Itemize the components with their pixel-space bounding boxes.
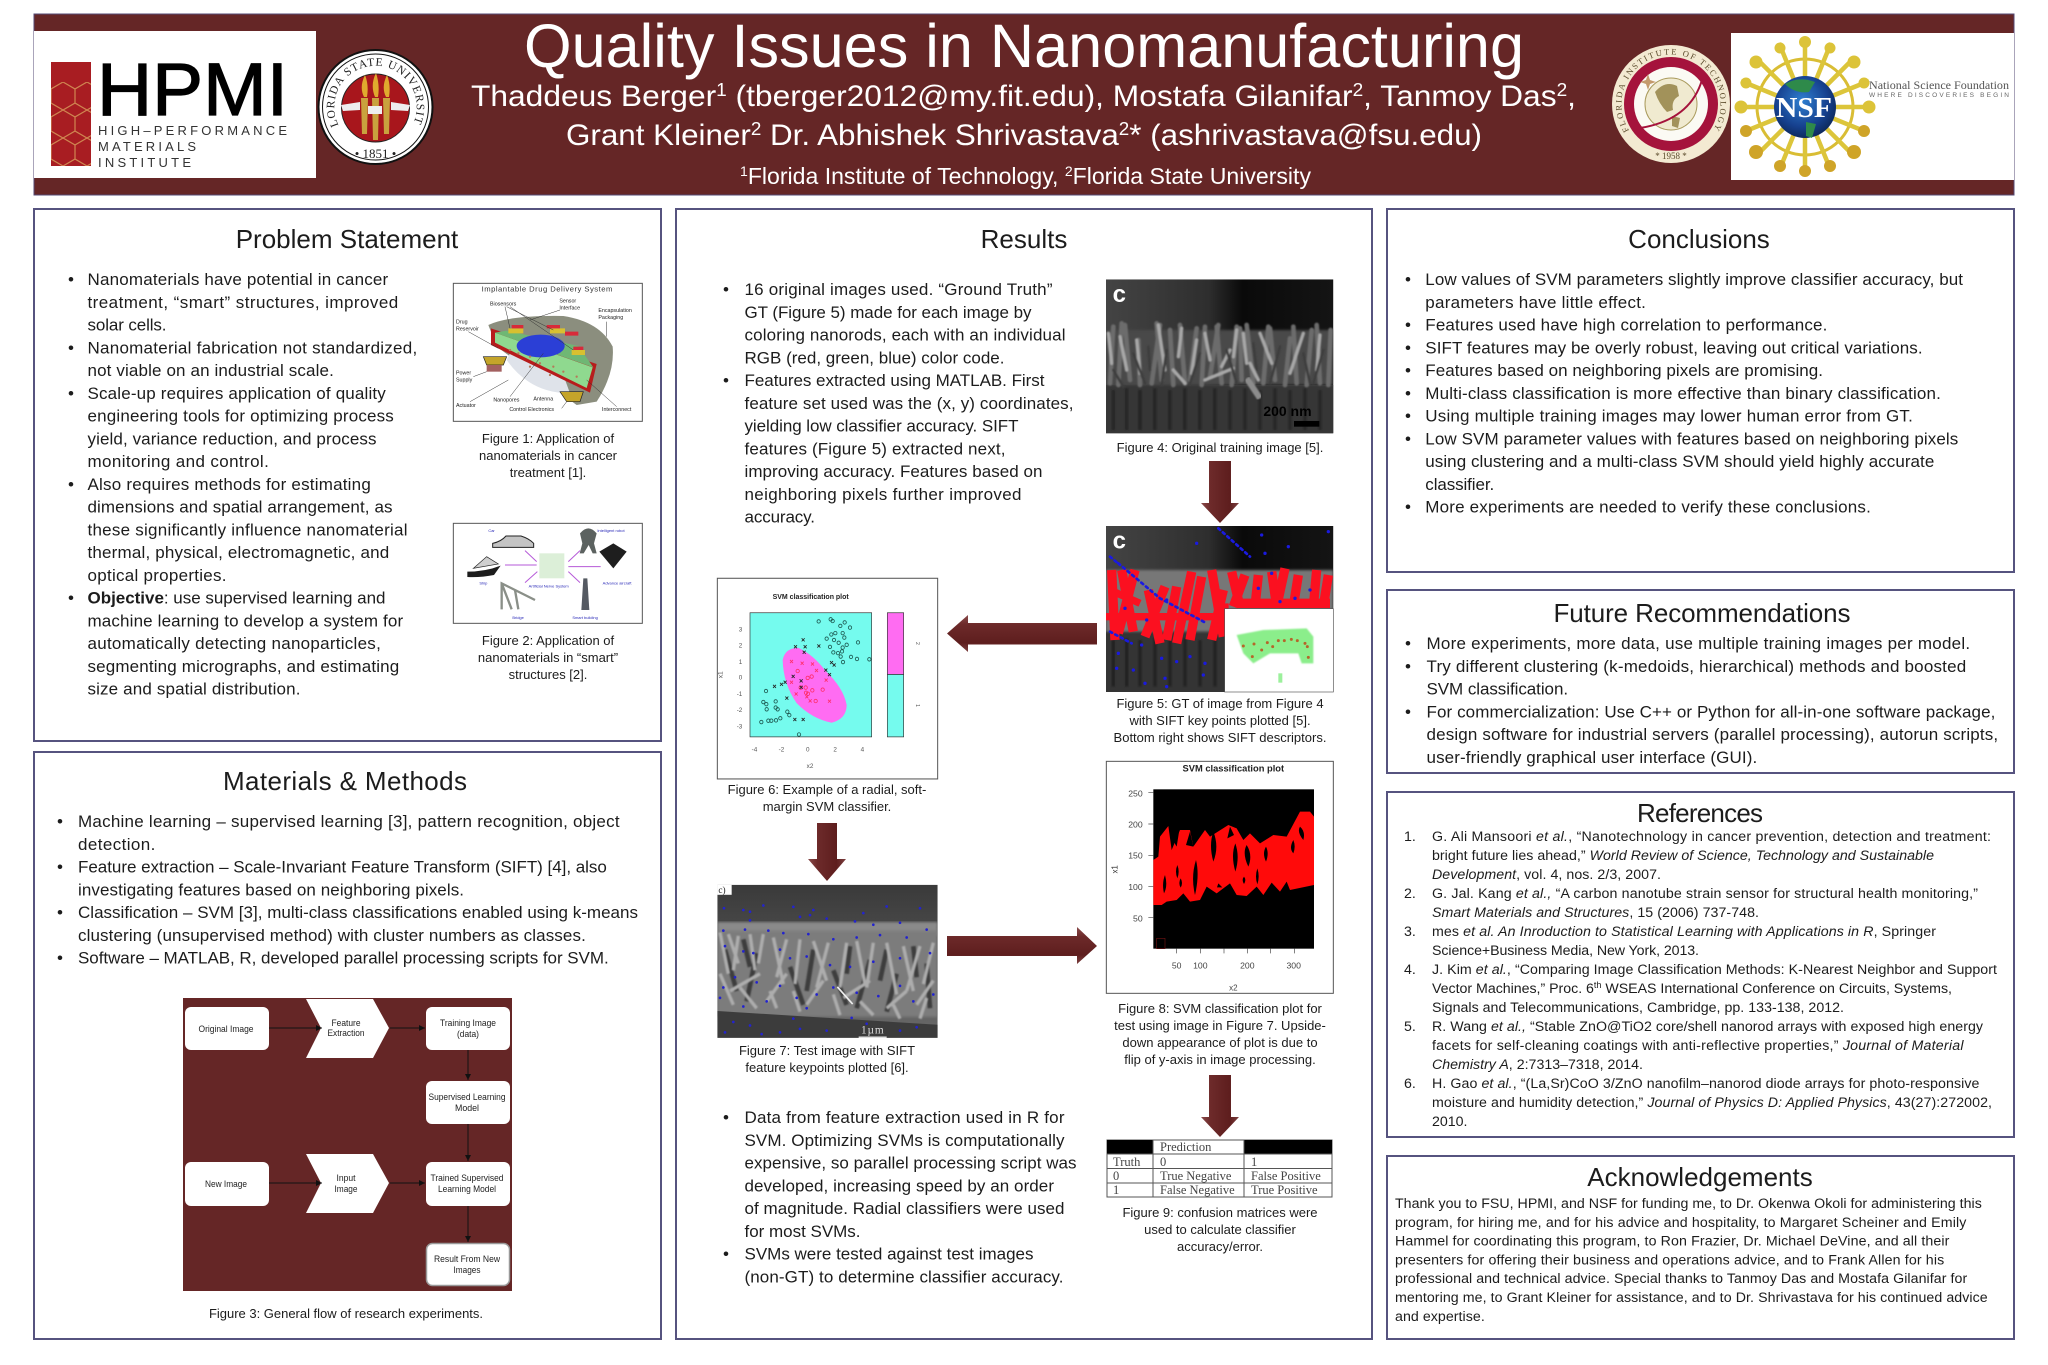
- figure 3: research flow chart: Image: [334, 1184, 358, 1194]
- text: conclusions bullets: [1405, 270, 1963, 516]
- text: results bullets upper: RGB (red, green, blue) color code.: [744, 348, 1004, 367]
- text: problem bullets: treatment, “smart” structures, improved: [88, 293, 398, 312]
- text: results bullets upper: neighboring pixels further improved: [744, 485, 1022, 504]
- figure 4: original training image: [1106, 279, 1333, 433]
- caption: figure 1: [479, 431, 618, 480]
- affiliations: 2: [1065, 163, 1073, 179]
- text: methods bullets: •: [57, 903, 63, 922]
- figure 9: confusion matrix table: 0: [1113, 1169, 1119, 1183]
- caption: figure 9: Figure 9: confusion matrices were: [1122, 1205, 1318, 1220]
- text: results bullets lower: Data from feature extraction used in R for: [744, 1108, 1065, 1127]
- text: problem bullets: Nanomaterial fabrication not standardized,: [88, 338, 417, 357]
- figure 9: confusion matrix table: 1: [1251, 1155, 1257, 1169]
- figure 8: SVM classification plot for test: 50: [1133, 913, 1143, 923]
- text: problem bullets: thermal, physical, electromagnetic, and: [88, 543, 389, 562]
- text: problem bullets: segmenting micrographs, and estimating: [88, 657, 399, 676]
- text: conclusions bullets: Multi-class classification is more effective than binary classification.: [1425, 384, 1941, 403]
- heading: results: Results: [981, 224, 1067, 254]
- figure 9: confusion matrix table: False Positive: [1251, 1169, 1321, 1183]
- figure 7: test image with SIFT keypoints: c): [718, 885, 726, 896]
- text: conclusions bullets: parameters have little effect.: [1425, 293, 1646, 312]
- text: future bullets: For commercialization: Use C++ or Python for all-in-one software package,: [1426, 702, 1995, 721]
- text: methods bullets: Software – MATLAB, R, developed parallel processing scripts for SVM.: [78, 948, 609, 968]
- figure 2: smart structures: Ship: [479, 580, 488, 585]
- text: results bullets upper: feature set used was the (x, y) coordinates,: [744, 394, 1074, 413]
- figure 1: implantable drug delivery system: Reservoir: [456, 326, 479, 332]
- figure 3: research flow chart: Input: [336, 1173, 356, 1183]
- text: results bullets lower: of magnitude. Radial classifiers were used: [744, 1199, 1064, 1218]
- figure 9: confusion matrix table: [1107, 1140, 1332, 1197]
- text: results bullets upper: 16 original images used. “Ground Truth”: [744, 280, 1053, 299]
- figure 3: research flow chart: [183, 998, 512, 1291]
- caption: figure 9: accuracy/error.: [1177, 1239, 1263, 1254]
- authors: 2: [1353, 80, 1363, 100]
- authors: 2: [751, 119, 761, 139]
- text: conclusions bullets: •: [1405, 361, 1411, 380]
- figure 3: research flow chart: Result From New: [434, 1254, 500, 1264]
- caption: figure 1: nanomaterials in cancer: [479, 448, 618, 463]
- figure 3: research flow chart: Model: [455, 1103, 479, 1113]
- text: conclusions bullets: •: [1405, 384, 1411, 403]
- text: problem bullets: •: [68, 270, 74, 289]
- heading: references: References: [1637, 798, 1763, 828]
- logo: Florida Institute of Technology seal: FLORIDA INSTITUTE OF TECHNOLOGY: [1616, 48, 1726, 134]
- text: results bullets upper: [723, 280, 1074, 526]
- figure 1: implantable drug delivery system: Supply: [456, 378, 473, 384]
- logo: HPMI: MATERIALS: [98, 139, 196, 154]
- text: problem bullets: size and spatial distribution.: [88, 680, 300, 698]
- figure 2: smart structures: [453, 523, 642, 623]
- text: conclusions bullets: Features used have high correlation to performance.: [1425, 316, 1827, 334]
- text: acknowledgements body: [1395, 1196, 1988, 1325]
- figure 6: radial SVM classifier plot: 1: [914, 704, 920, 707]
- text: problem bullets: machine learning to develop a system for: [88, 611, 404, 630]
- logo: HPMI: HIGH–PERFORMANCE: [98, 123, 287, 138]
- text: reference list: Chemistry A, 2:7313–7318, 2014.: [1432, 1057, 1643, 1073]
- figure 1: implantable drug delivery system: Nanopores: [493, 398, 520, 404]
- figure 1: implantable drug delivery system: Implantable Drug Delivery System: [482, 284, 612, 293]
- figure 9: confusion matrix table: True Negative: [1160, 1169, 1232, 1183]
- text: results bullets lower: SVMs were tested against test images: [744, 1244, 1034, 1264]
- affiliations: Florida Institute of Technology,: [748, 163, 1065, 189]
- figure 4: original training image: 200 nm: [1263, 403, 1312, 419]
- figure 1: implantable drug delivery system: Actuator: [456, 403, 476, 409]
- text: conclusions bullets: •: [1405, 270, 1411, 289]
- text: future bullets: Try different clustering (k-medoids, hierarchical) methods and boosted: [1426, 657, 1966, 676]
- figure 1: implantable drug delivery system: Interconnect: [602, 407, 632, 413]
- figure 9: confusion matrix table: Prediction: [1160, 1140, 1212, 1154]
- text: future bullets: design software for industrial servers (parallel processing), autorun scripts,: [1426, 725, 1998, 744]
- heading: acknowledgements: Acknowledgements: [1587, 1162, 1813, 1192]
- figure 8: SVM classification plot for test: 150: [1128, 851, 1143, 861]
- caption: figure 8: Figure 8: SVM classification plot for: [1118, 1001, 1323, 1016]
- text: reference list: Smart Materials and Structures, 15 (2006) 737-748.: [1432, 905, 1759, 921]
- text: results bullets lower: SVM. Optimizing SVMs is computationally: [744, 1131, 1065, 1150]
- text: problem bullets: solar cells.: [88, 316, 166, 334]
- affiliations: Florida State University: [1073, 163, 1312, 189]
- figure 6: radial SVM classifier plot: -3: [737, 723, 743, 730]
- arrow: figure 4 to figure 5: [1201, 461, 1239, 523]
- text: results bullets upper: •: [723, 371, 729, 390]
- figure 8: SVM classification plot for test: 250: [1128, 788, 1143, 798]
- text: acknowledgements body: Thank you to FSU, HPMI, and NSF for funding me, to Dr. Okenwa Okoli for administering this: [1395, 1196, 1982, 1212]
- caption: figure 3: Figure 3: General flow of research experiments.: [209, 1306, 483, 1321]
- figure 8: SVM classification plot for test: SVM classification plot: [1183, 764, 1284, 774]
- logo: National Science Foundation: WHERE DISCOVERIES BEGIN: [1869, 92, 2009, 99]
- figure 6: radial SVM classifier plot: 3: [739, 626, 743, 633]
- authors: [471, 80, 1576, 152]
- text: problem bullets: •: [68, 338, 74, 357]
- text: reference list: 1.: [1404, 829, 1416, 845]
- text: results bullets upper: coloring nanorods, each with an individual: [744, 326, 1066, 344]
- figure 4: original training image: c: [1113, 281, 1126, 308]
- text: problem bullets: yield, variance reduction, and process: [88, 429, 376, 448]
- figure 9: confusion matrix table: 0: [1160, 1155, 1166, 1169]
- caption: figure 8: flip of y-axis in image processing.: [1124, 1052, 1316, 1067]
- figure 1: implantable drug delivery system: Biosensors: [490, 301, 517, 307]
- figure 6: radial SVM classifier plot: 0: [806, 747, 810, 754]
- text: reference list: G. Ali Mansoori et al., “Nanotechnology in cancer prevention, detection and treatment:: [1432, 829, 1991, 845]
- text: conclusions bullets: classifier.: [1425, 475, 1494, 494]
- authors: ,: [1567, 80, 1576, 113]
- caption: figure 5: with SIFT key points plotted [5].: [1128, 713, 1311, 728]
- text: conclusions bullets: Low values of SVM parameters slightly improve classifier accuracy, but: [1425, 270, 1963, 289]
- caption: figure 8: test using image in Figure 7. Upside-: [1114, 1018, 1326, 1033]
- text: problem bullets: Objective: use supervised learning and: [88, 588, 386, 608]
- text: future bullets: [1405, 634, 1998, 767]
- figure 3: research flow chart: Trained Supervised: [430, 1173, 504, 1183]
- figure 8: SVM classification plot for test: x1: [1110, 865, 1119, 874]
- text: conclusions bullets: •: [1405, 316, 1411, 334]
- text: methods bullets: Feature extraction – Scale-Invariant Feature Transform (SIFT) [4], also: [78, 858, 607, 876]
- panel: future recommendations: [1387, 590, 2014, 773]
- text: future bullets: user-friendly graphical user interface (GUI).: [1426, 748, 1757, 767]
- arrow: figure 5 to figure 6: [947, 615, 1097, 652]
- caption: figure 1: treatment [1].: [510, 465, 586, 480]
- figure 6: radial SVM classifier plot: 2: [833, 747, 837, 754]
- text: results bullets lower: •: [723, 1244, 729, 1264]
- figure 3: research flow chart: Images: [454, 1265, 481, 1275]
- figure 6: radial SVM classifier plot: SVM classification plot: [773, 593, 849, 601]
- text: conclusions bullets: Using multiple training images may lower human error from GT.: [1425, 406, 1913, 426]
- text: methods bullets: detection.: [78, 835, 155, 854]
- text: reference list: 6.: [1404, 1076, 1416, 1092]
- figure 7: test image with SIFT keypoints: [717, 885, 938, 1038]
- caption: figure 2: [478, 633, 618, 682]
- caption: figure 9: [1122, 1205, 1318, 1254]
- text: reference list: 3.: [1404, 924, 1416, 940]
- logo: Florida Institute of Technology seal: * 1958 *: [1655, 151, 1687, 161]
- logo: HPMI: [34, 31, 316, 178]
- figure 1: implantable drug delivery system: Antenna: [533, 397, 553, 403]
- figure 9: confusion matrix table: 1: [1113, 1183, 1119, 1197]
- authors: Dr. Abhishek Shrivastava: [761, 119, 1119, 152]
- figure 7: test image with SIFT keypoints: 1µm: [861, 1024, 884, 1036]
- text: reference list: H. Gao et al., “(La,Sr)CoO 3/ZnO nanofilm–nanorod diode arrays for photo-responsive: [1432, 1076, 1980, 1092]
- text: methods bullets: investigating features based on neighboring pixels.: [78, 880, 464, 899]
- text: reference list: 2.: [1404, 886, 1416, 902]
- authors: (tberger2012@my.fit.edu), Mostafa Gilanifar: [727, 80, 1353, 113]
- text: conclusions bullets: using clustering and a multi-class SVM should yield highly accurate: [1425, 452, 1934, 471]
- caption: figure 7: Figure 7: Test image with SIFT: [739, 1043, 915, 1058]
- figure 8: SVM classification plot for test: x2: [1229, 984, 1238, 993]
- text: methods bullets: [57, 812, 638, 968]
- text: reference list: bright future lies ahead,” World Review of Science, Technology and Sustainable: [1432, 848, 1934, 864]
- text: problem bullets: monitoring and control.: [88, 452, 269, 471]
- figure 3: research flow chart: Training Image: [440, 1018, 496, 1028]
- figure 8: SVM classification plot for test: 50: [1172, 960, 1182, 970]
- logo: National Science Foundation: NSF: [1776, 93, 1832, 124]
- text: reference list: th: [1594, 980, 1601, 990]
- text: reference list: [1404, 829, 1997, 1130]
- caption: figure 6: [728, 782, 926, 814]
- text: results bullets upper: yielding low classifier accuracy. SIFT: [744, 416, 1018, 436]
- text: acknowledgements body: presenters for offering their business and operations advice, and to Frank Allen for his: [1395, 1252, 1944, 1268]
- text: conclusions bullets: SIFT features may be overly robust, leaving out critical variations.: [1425, 338, 1923, 357]
- caption: figure 2: structures [2].: [509, 667, 587, 682]
- figure 6: radial SVM classifier plot: 0: [739, 675, 743, 682]
- text: reference list: WSEAS International Conference on Circuits, Systems,: [1601, 981, 1952, 997]
- figure 9: confusion matrix table: True Positive: [1251, 1183, 1318, 1197]
- authors: 1: [716, 80, 727, 100]
- caption: figure 8: down appearance of plot is due to: [1122, 1035, 1318, 1050]
- figure 6: radial SVM classifier plot: 4: [861, 747, 865, 754]
- caption: figure 7: feature keypoints plotted [6].: [745, 1060, 909, 1075]
- caption: figure 9: used to calculate classifier: [1144, 1222, 1297, 1237]
- panel: references: [1387, 792, 2014, 1137]
- text: problem bullets: optical properties.: [88, 566, 226, 585]
- caption: figure 8: [1114, 1001, 1326, 1067]
- figure 8: SVM classification plot for test: 100: [1193, 960, 1208, 970]
- caption: figure 2: Figure 2: Application of: [482, 633, 615, 648]
- text: reference list: 2010.: [1432, 1114, 1468, 1130]
- text: problem bullets: [68, 270, 417, 698]
- authors: 2: [1119, 119, 1129, 139]
- text: results bullets lower: •: [723, 1108, 729, 1127]
- text: results bullets lower: (non-GT) to determine classifier accuracy.: [744, 1267, 1064, 1286]
- text: reference list: 4.: [1404, 962, 1416, 978]
- text: methods bullets: •: [57, 948, 63, 968]
- figure 5: ground truth with SIFT key points: [1106, 526, 1333, 692]
- heading: conclusions: Conclusions: [1628, 224, 1770, 254]
- text: conclusions bullets: •: [1405, 406, 1411, 426]
- figure 6: radial SVM classifier plot: -2: [779, 747, 785, 754]
- logo: National Science Foundation: [1731, 33, 2014, 180]
- figure 8: SVM classification plot for test: 300: [1286, 960, 1301, 970]
- figure 6: radial SVM classifier plot: -4: [752, 747, 758, 754]
- text: acknowledgements body: mentoring me, to Grant Kleiner for assistance, and to Dr. Shrivastava for his continued advice: [1395, 1290, 1988, 1306]
- affiliations: 1: [740, 163, 748, 179]
- figure 3: research flow chart: (data): [457, 1029, 479, 1039]
- authors: 2: [1557, 80, 1567, 100]
- text: results bullets lower: for most SVMs.: [744, 1222, 860, 1241]
- authors: * (ashrivastava@fsu.edu): [1129, 119, 1482, 152]
- title: Quality Issues in Nanomanufacturing: [524, 12, 1524, 80]
- text: future bullets: •: [1405, 702, 1411, 721]
- heading: problem statement: Problem Statement: [236, 224, 459, 254]
- figure 3: research flow chart: Supervised Learning: [428, 1092, 506, 1102]
- figure 2: smart structures: Smart building: [572, 615, 598, 620]
- figure 5: ground truth with SIFT key points: c: [1113, 528, 1126, 555]
- text: results bullets upper: GT (Figure 5) made for each image by: [744, 303, 1032, 322]
- authors: Grant Kleiner: [566, 119, 743, 152]
- authors: Thaddeus Berger: [471, 80, 703, 113]
- text: results bullets upper: Features extracted using MATLAB. First: [744, 371, 1045, 390]
- caption: figure 2: nanomaterials in “smart”: [478, 650, 618, 665]
- text: problem bullets: not viable on an industrial scale.: [88, 361, 334, 380]
- figure 9: confusion matrix table: Truth: [1113, 1155, 1141, 1169]
- text: reference list: 5.: [1404, 1019, 1416, 1035]
- figure 3: research flow chart: Extraction: [328, 1028, 364, 1038]
- caption: figure 7: [739, 1043, 915, 1075]
- text: reference list: Development, vol. 4, nos. 2/3, 2007.: [1432, 867, 1661, 883]
- arrow: figure 8 to figure 9: [1201, 1075, 1239, 1137]
- figure 2: smart structures: Artificial Nerve System: [529, 583, 569, 588]
- text: problem bullets: Also requires methods for estimating: [88, 475, 371, 494]
- text: reference list: J. Kim et al., “Comparing Image Classification Methods: K-Nearest Neighbor and Support: [1432, 962, 1997, 978]
- panel: problem statement: [34, 209, 661, 741]
- text: results bullets lower: expensive, so parallel processing script was: [744, 1154, 1076, 1172]
- figure 1: implantable drug delivery system: Power: [456, 371, 471, 377]
- heading: materials and methods: Materials & Methods: [223, 766, 467, 796]
- text: conclusions bullets: Features based on neighboring pixels are promising.: [1425, 361, 1823, 380]
- text: methods bullets: •: [57, 858, 63, 876]
- text: acknowledgements body: Hammel for coordinating this program, to Ron Frazier, Dr. Michael DeVine, and all their: [1395, 1234, 1950, 1250]
- text: problem bullets: these significantly influence nanomaterial: [88, 520, 408, 539]
- figure 2: smart structures: Car: [488, 528, 495, 533]
- figure 1: implantable drug delivery system: [453, 283, 642, 421]
- logo: Florida State University seal: • 1851 •: [355, 146, 396, 161]
- figure 6: radial SVM classifier plot: -1: [737, 691, 743, 698]
- text: conclusions bullets: •: [1405, 498, 1411, 516]
- panel: conclusions: [1387, 209, 2014, 572]
- arrow: figure 6 to figure 7: [808, 823, 846, 881]
- caption: figure 5: Bottom right shows SIFT descriptors.: [1114, 730, 1326, 745]
- text: acknowledgements body: and expertise.: [1395, 1309, 1485, 1325]
- logo: HPMI: HPMI: [97, 48, 288, 131]
- text: reference list: Signals and Telecommunications, Cambridge, pp. 133-138, 2012.: [1432, 1000, 1844, 1016]
- figure 6: radial SVM classifier plot: 2: [739, 642, 743, 650]
- text: conclusions bullets: More experiments are needed to verify these conclusions.: [1425, 498, 1871, 516]
- text: methods bullets: •: [57, 812, 63, 831]
- text: reference list: mes et al. An Inroduction to Statistical Learning with Applications in R, Springer: [1432, 924, 1936, 940]
- logo: National Science Foundation: National Science Foundation: [1869, 78, 2009, 92]
- text: reference list: R. Wang et al., “Stable ZnO@TiO2 core/shell nanorod arrays with exposed high energy: [1432, 1019, 1984, 1035]
- text: problem bullets: engineering tools for optimizing process: [88, 406, 394, 426]
- authors: , Tanmoy Das: [1363, 80, 1557, 113]
- figure 2: smart structures: Advance aircraft: [603, 580, 632, 585]
- figure 6: radial SVM classifier plot: 2: [914, 642, 920, 645]
- caption: figure 6: margin SVM classifier.: [763, 799, 891, 814]
- text: future bullets: •: [1405, 634, 1411, 653]
- panel: acknowledgements: [1387, 1156, 2014, 1339]
- text: future bullets: SVM classification.: [1426, 680, 1568, 698]
- figure 6: radial SVM classifier plot: x2: [807, 763, 814, 770]
- text: results bullets upper: •: [723, 280, 729, 299]
- text: conclusions bullets: Low SVM parameter values with features based on neighboring pixels: [1425, 429, 1958, 448]
- text: reference list: moisture and humidity detection,” Journal of Physics D: Applied Physics, 43(27):272002,: [1432, 1095, 1992, 1111]
- figure 2: smart structures: Bridge: [512, 615, 525, 620]
- text: reference list: Vector Machines,” Proc. 6: [1432, 981, 1594, 997]
- text: results bullets upper: accuracy.: [744, 508, 815, 526]
- text: future bullets: •: [1405, 657, 1411, 676]
- text: acknowledgements body: professional and technical advice. Special thanks to Tanmoy Das and Mostafa Gilanifar for: [1395, 1271, 1967, 1287]
- text: methods bullets: Classification – SVM [3], multi-class classifications enabled using k-means: [78, 903, 638, 922]
- caption: figure 5: Figure 5: GT of image from Figure 4: [1116, 696, 1324, 711]
- text: results bullets lower: [723, 1108, 1076, 1286]
- figure 1: implantable drug delivery system: Encapsulation: [598, 308, 632, 314]
- text: reference list: Science+Business Media, New York, 2013.: [1432, 943, 1699, 959]
- text: problem bullets: Scale-up requires application of quality: [88, 384, 386, 403]
- figure 8: SVM classification plot for test: 200: [1240, 960, 1255, 970]
- figure 3: research flow chart: New Image: [205, 1179, 247, 1189]
- text: results bullets lower: developed, increasing speed by an order: [744, 1176, 1054, 1195]
- text: results bullets upper: features (Figure 5) extracted next,: [744, 439, 1006, 458]
- figure 1: implantable drug delivery system: Control Electronics: [509, 407, 554, 413]
- figure 8: SVM classification plot for test: 100: [1128, 882, 1143, 892]
- figure 3: research flow chart: Learning Model: [438, 1184, 496, 1194]
- text: reference list: G. Jal. Kang et al., “A carbon nanotube strain sensor for structural health monitoring,”: [1432, 886, 1978, 902]
- figure 9: confusion matrix table: False Negative: [1160, 1183, 1235, 1197]
- text: problem bullets: •: [68, 475, 74, 494]
- text: future bullets: More experiments, more data, use multiple training images per model.: [1426, 634, 1970, 653]
- figure 6: radial SVM classifier plot: 1: [739, 659, 743, 666]
- text: problem bullets: •: [68, 384, 74, 403]
- figure 3: research flow chart: Feature: [332, 1018, 360, 1028]
- arrow: figure 7 to figure 8: [947, 927, 1097, 964]
- caption: figure 4: Figure 4: Original training image [5].: [1117, 440, 1323, 455]
- figure 1: implantable drug delivery system: Sensor: [559, 299, 576, 305]
- figure 6: radial SVM classifier plot: [717, 578, 938, 779]
- text: methods bullets: Machine learning – supervised learning [3], pattern recognition, object: [78, 812, 620, 831]
- figure 6: radial SVM classifier plot: -2: [737, 707, 743, 714]
- figure 8: SVM classification plot for test: 200: [1128, 819, 1143, 829]
- text: reference list: facets for self-cleaning coatings with anti-reflective properties,” Journal of Material: [1432, 1038, 1964, 1054]
- caption: figure 1: Figure 1: Application of: [482, 431, 615, 446]
- text: acknowledgements body: program, for hiring me, and for his advice and hospitality, to Margaret Scheiner and Emily: [1395, 1215, 1967, 1231]
- figure 1: implantable drug delivery system: Interface: [559, 306, 580, 312]
- figure 3: research flow chart: Original Image: [198, 1024, 254, 1034]
- text: problem bullets: dimensions and spatial arrangement, as: [88, 498, 392, 516]
- heading: future recommendations: Future Recommendations: [1554, 598, 1850, 628]
- text: results bullets upper: improving accuracy. Features based on: [744, 462, 1042, 481]
- figure 6: radial SVM classifier plot: x1: [718, 671, 725, 678]
- panel: materials and methods: [34, 752, 661, 1339]
- figure 2: smart structures: Intelligent robot: [597, 528, 625, 533]
- text: conclusions bullets: •: [1405, 429, 1411, 448]
- logo: HPMI: INSTITUTE: [98, 155, 191, 170]
- logo: Florida State University seal: [318, 49, 434, 165]
- figure 1: implantable drug delivery system: Drug: [456, 319, 468, 325]
- caption: figure 5: [1114, 696, 1326, 745]
- panel: results: [676, 209, 1372, 1339]
- text: problem bullets: •: [68, 588, 74, 608]
- text: problem bullets: Nanomaterials have potential in cancer: [88, 270, 389, 289]
- text: conclusions bullets: •: [1405, 338, 1411, 357]
- caption: figure 6: Figure 6: Example of a radial, soft-: [728, 782, 926, 797]
- header banner: [34, 12, 2014, 196]
- figure 1: implantable drug delivery system: Packaging: [598, 315, 623, 321]
- text: problem bullets: automatically detecting nanoparticles,: [88, 634, 381, 653]
- figure 8: SVM classification plot for test: [1106, 761, 1333, 993]
- text: methods bullets: clustering (unsupervised method) with cluster numbers as classes.: [78, 926, 586, 945]
